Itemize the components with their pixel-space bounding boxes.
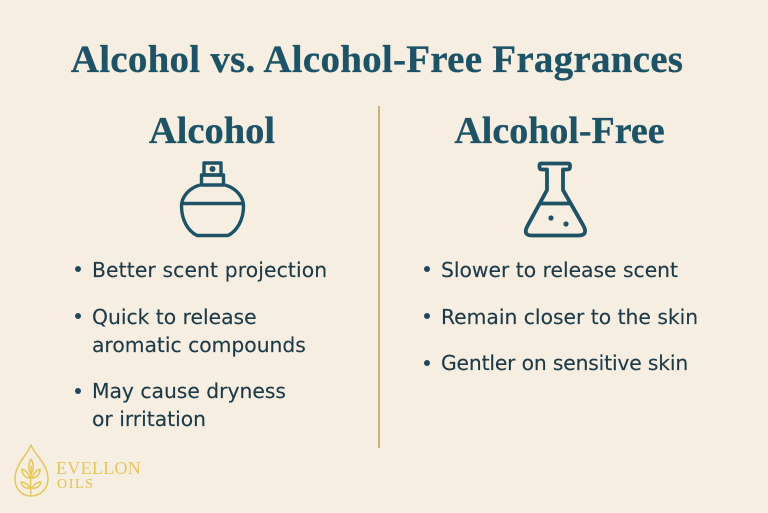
bullet: quick release: aromatic compounds xyxy=(92,333,306,357)
bullet: quick release: Quick to release xyxy=(92,305,257,329)
heading: alcohol: Alcohol xyxy=(149,110,275,152)
logo subtitle: OILS xyxy=(57,477,95,492)
bullet: gentler: Gentler on sensitive skin xyxy=(441,351,688,375)
heading: alcohol-free: Alcohol-Free xyxy=(454,110,665,152)
bullet: dryness: May cause dryness xyxy=(92,379,286,403)
title: Alcohol vs. Alcohol-Free Fragrances xyxy=(71,38,683,81)
column divider xyxy=(378,106,380,448)
bullet: scent projection: Better scent projection xyxy=(92,258,327,282)
icon: perfume bottle xyxy=(180,161,246,238)
bullet: dryness xyxy=(75,379,286,431)
bullet: closer: Remain closer to the skin xyxy=(441,305,698,329)
bullet: slower: Slower to release scent xyxy=(441,258,678,282)
panel: alcohol xyxy=(75,110,327,431)
icon: oil drop with sprig xyxy=(14,444,49,497)
panel: alcohol-free xyxy=(424,110,698,375)
icon: flask xyxy=(524,162,587,238)
logo: Evellon Oils xyxy=(14,444,141,497)
logo wordmark: EVELLON xyxy=(56,458,141,478)
bullet: dryness: or irritation xyxy=(92,407,206,431)
bullet: quick release xyxy=(75,305,306,357)
